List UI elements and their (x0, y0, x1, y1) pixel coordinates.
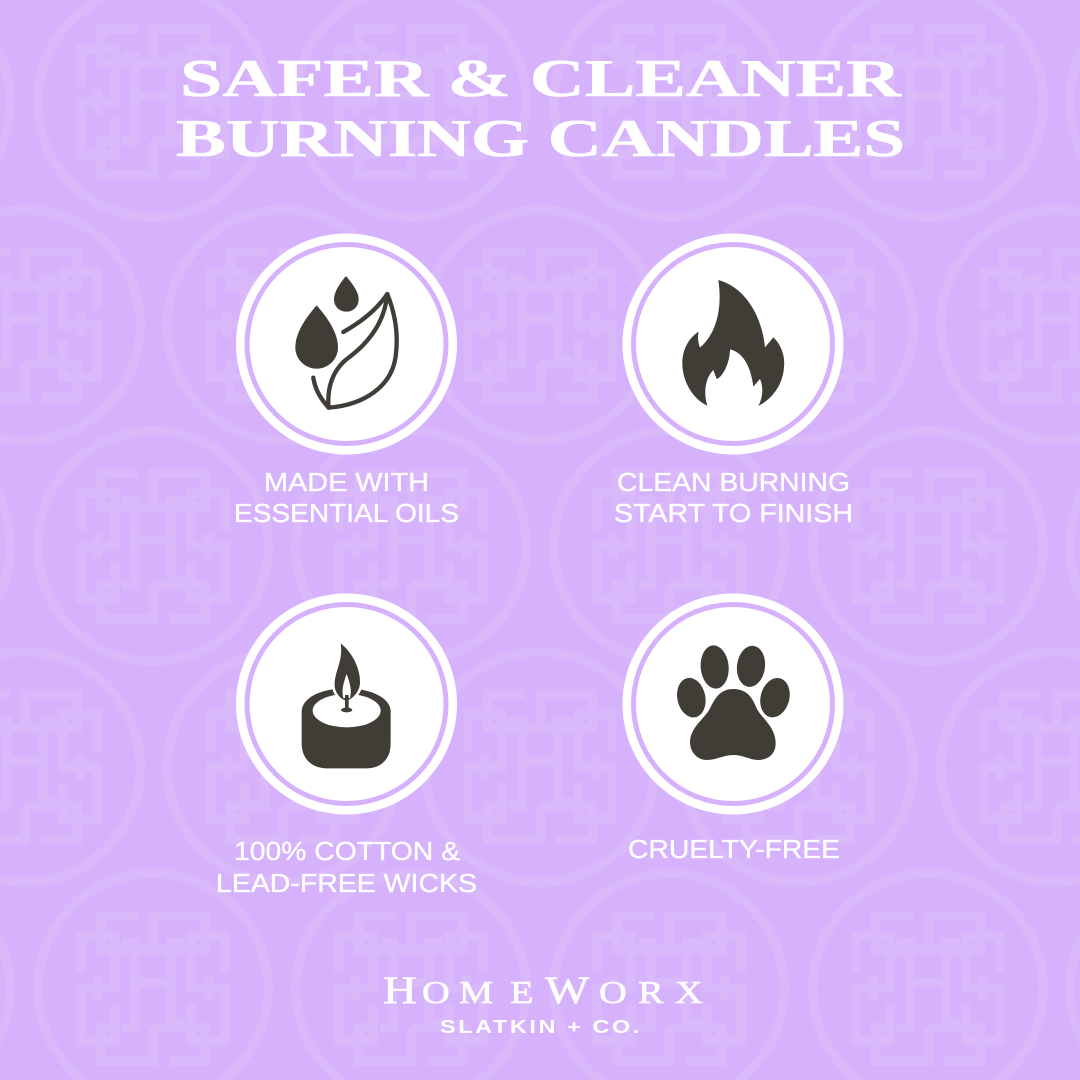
label: CRUELTY-FREE (628, 836, 840, 864)
label: START TO FINISH (614, 500, 853, 528)
title: SAFER & CLEANER (180, 50, 902, 108)
label: MADE WITH (264, 469, 429, 497)
icon: tealight candle (302, 643, 391, 768)
badge circle (236, 594, 457, 814)
icon: paw print (673, 644, 794, 760)
label (614, 469, 853, 528)
label (216, 838, 477, 898)
panel: essential oils (234, 234, 459, 528)
icon: flame (682, 280, 784, 406)
badge circle (622, 234, 844, 454)
logo: SLATKIN + CO. (440, 1017, 642, 1037)
panel: cruelty-free (622, 594, 844, 864)
logo: HOME W ORX (383, 970, 703, 1012)
label: ESSENTIAL OILS (234, 500, 459, 528)
logo (383, 970, 703, 1037)
label (234, 469, 459, 528)
badge circle (236, 234, 457, 454)
title: BURNING CANDLES (176, 110, 905, 168)
icon: drops and leaf (295, 276, 397, 408)
label: LEAD-FREE WICKS (216, 870, 477, 898)
panel: cotton wicks (216, 594, 477, 898)
badge circle (622, 594, 844, 814)
label: 100% COTTON & (234, 838, 460, 866)
label: CLEAN BURNING (617, 469, 850, 497)
panel: clean burning (614, 234, 853, 528)
title (176, 50, 905, 168)
